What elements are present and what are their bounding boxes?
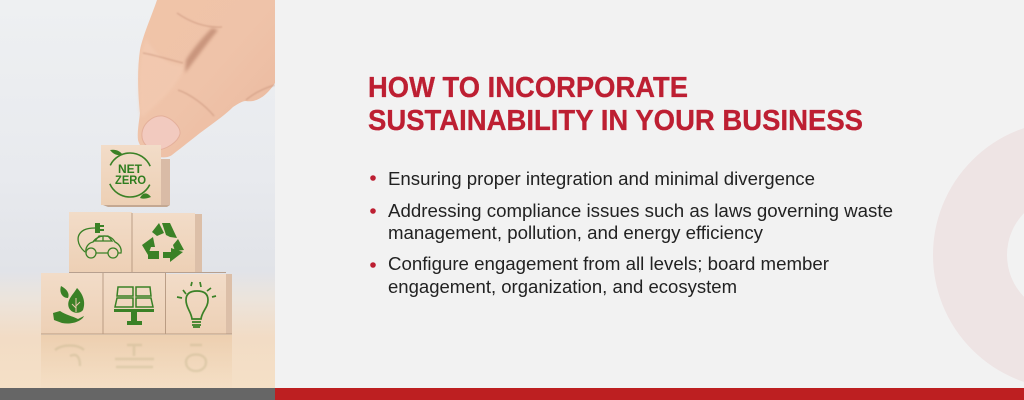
bullet 3: engagement, organization, and ecosystem	[388, 277, 737, 297]
block seams	[41, 213, 232, 334]
block: light bulb	[166, 274, 232, 334]
heading: HOW TO INCORPORATE	[368, 72, 688, 104]
heading	[368, 72, 863, 137]
bullet 3	[370, 254, 829, 297]
bullet 1: Ensuring proper integration and minimal divergence	[388, 169, 815, 189]
bullet 2	[370, 201, 893, 243]
hand	[138, 0, 275, 157]
block: net zero	[101, 145, 170, 207]
block: net zero: ZERO	[115, 173, 146, 187]
photo: wooden sustainability blocks and hand	[0, 0, 275, 388]
bullet 3: Configure engagement from all levels; board member	[388, 254, 829, 274]
bottom bar: grey segment	[0, 388, 275, 400]
block: electric car	[69, 212, 132, 272]
table reflection	[41, 335, 232, 388]
bullet 2: management, pollution, and energy efficiency	[388, 223, 763, 243]
bullet 2: Addressing compliance issues such as laws governing waste	[388, 201, 893, 221]
block: recycling	[132, 213, 202, 272]
block: solar panel	[103, 273, 166, 334]
block: leaf in hand	[41, 273, 103, 334]
heading: SUSTAINABILITY IN YOUR BUSINESS	[368, 105, 863, 137]
block: net zero: NET	[118, 164, 142, 176]
bullet list	[370, 169, 893, 297]
bottom bar: red segment	[275, 388, 1024, 400]
